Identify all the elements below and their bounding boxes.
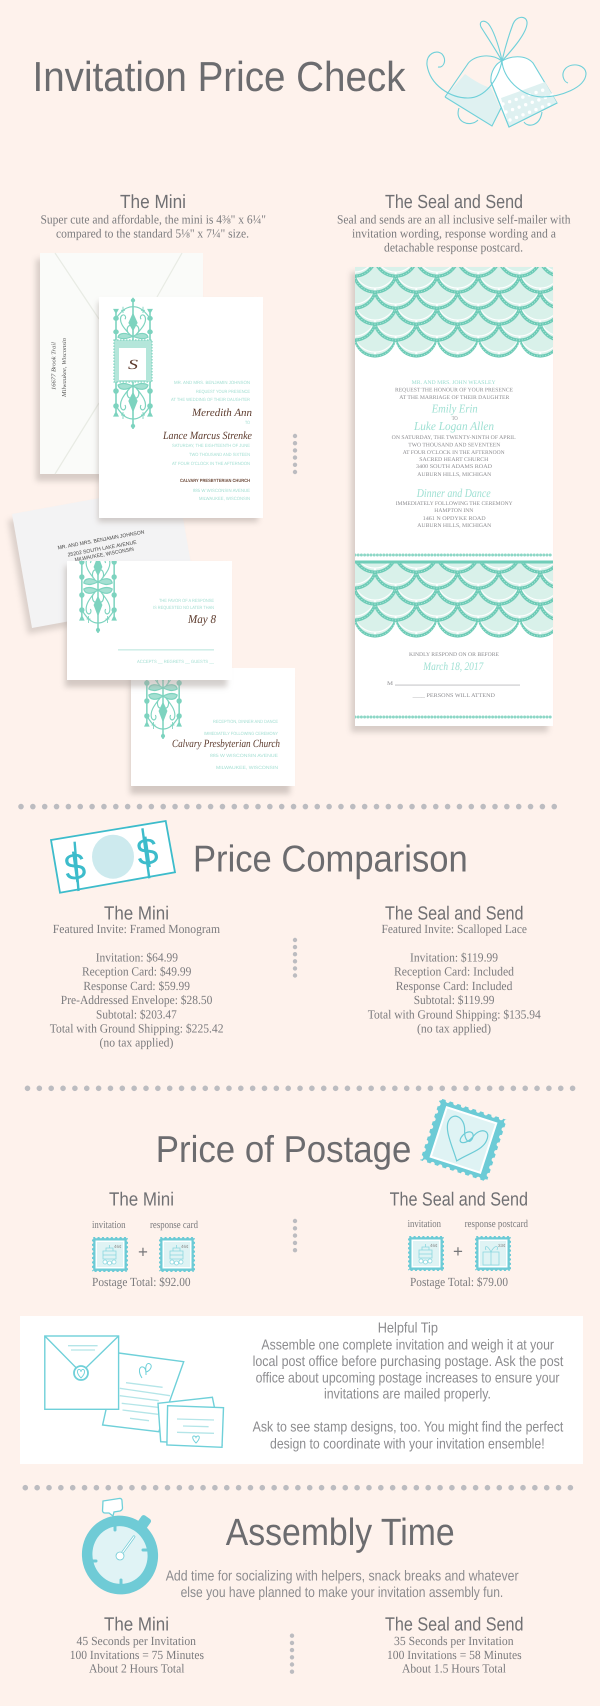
ornament with monogram [114,298,152,429]
tip text: Assemble one complete invitation and weigh it at your [261,1337,554,1353]
photo: reception card [128,668,295,796]
label: invitation: invitation [92,1220,126,1231]
ornament [79,561,117,633]
needle [120,1537,134,1556]
label: response postcard: response postcard [465,1219,529,1230]
icon: dollar bill [51,821,175,893]
vertical dots assembly [290,1636,294,1672]
ornament [144,680,182,739]
recipient address [57,529,145,563]
back reply card [158,1397,222,1445]
price list lines: (no tax applied) [100,1036,173,1050]
price list lines: Subtotal: $119.99 [414,993,494,1007]
price list lines: Featured Invite: Framed Monogram [53,922,220,936]
response wording: May 8 [187,612,216,626]
invitation wording: AT FOUR O'CLOCK IN THE AFTERNOON [172,461,250,466]
invitation wording: AT THE WEDDING OF THEIR DAUGHTER [171,397,251,402]
invitation wording: Dinner and Dance [416,486,491,500]
reception wording: 885 W WISCONSIN AVENUE [210,753,278,758]
return address: 16677 Brook Trail [50,342,58,390]
price list lines: Pre-Addressed Envelope: $28.50 [61,993,212,1007]
invitation wording: MILWAUKEE, WISCONSIN [199,496,250,501]
panel: mini assembly time [70,1615,204,1676]
reception wording: IMMEDIATELY FOLLOWING CEREMONY [204,731,278,736]
dollar sign left bar [75,842,78,891]
heading: The Mini: The Mini [104,1615,169,1636]
dollar sign right bar [142,828,149,878]
reception wording: MILWAUKEE, WISCONSIN [216,765,278,770]
left bell [445,56,502,126]
invitation wording: IMMEDIATELY FOLLOWING THE CEREMONY [396,501,513,507]
invitation wording: AT FOUR O'CLOCK IN THE AFTERNOON [403,450,505,456]
vertical dots between invitation photos [293,436,297,472]
text: seal and send description: Seal and sends are an all inclusive self-mailer with [337,212,571,226]
dotted divider 2 [28,1086,573,1091]
assembly lines: About 1.5 Hours Total [402,1662,506,1676]
recipient address: MR. AND MRS. BENJAMIN JOHNSON [57,529,145,551]
invitation wording: TWO THOUSAND AND SEVENTEEN [408,443,500,449]
price list lines: Reception Card: Included [394,965,515,979]
invitation wording: Luke Logan Allen [413,419,494,433]
tip text [253,1321,563,1452]
tip text: Helpful Tip [378,1321,438,1337]
heading: The Seal and Send: The Seal and Send [390,1189,528,1210]
invitation wording: 1461 N OPDYKE ROAD [423,516,486,522]
plus sign: + [453,1242,463,1261]
text: assembly note: else you have planned to make your invitation assembly fun. [181,1585,503,1601]
heading: The Seal and Send: The Seal and Send [385,903,524,924]
icon: stopwatch [74,1498,166,1603]
stamp: response card: 46¢ [181,1244,189,1249]
assembly lines [387,1634,522,1676]
stamp: invitation: 46¢ [114,1244,122,1249]
photo: mini invitation card [98,297,263,522]
dollar sign right: $ [134,830,161,875]
invitation wording: 3400 SOUTH ADAMS ROAD [416,464,492,470]
invitation wording: MR. AND MRS. BENJAMIN JOHNSON [174,380,250,385]
text: seal and send description: invitation wording, response wording and a [352,226,556,240]
assembly lines: 100 Invitations = 58 Minutes [387,1648,522,1662]
invitation wording: REQUEST THE HONOUR OF YOUR PRESENCE [395,388,514,394]
watch body [74,1507,166,1603]
dotted divider 1 [21,804,566,809]
assembly lines: 100 Invitations = 75 Minutes [70,1648,204,1662]
invitation wording: AUBURN HILLS, MICHIGAN [417,472,491,478]
invitation wording [392,380,516,529]
recipient address: MILWAUKEE, WISCONSIN [74,547,135,563]
vertical dots price comparison [293,940,297,976]
response wording [118,598,216,664]
return address [50,338,68,398]
heading: Assembly Time: Assembly Time [226,1512,455,1554]
invitation wording: ON SATURDAY, THE TWENTY-NINTH OF APRIL [392,435,516,441]
reception wording [172,719,280,770]
scalloped lace band lower [354,560,561,639]
text: mini description [40,212,266,240]
invitation wording: REQUEST YOUR PRESENCE [196,389,250,394]
envelope with seal [45,1336,119,1409]
illustration: invitation suite [45,1336,223,1447]
price list lines: (no tax applied) [417,1021,491,1035]
heading: Price of Postage: Price of Postage [156,1128,411,1170]
text: assembly note: Add time for socializing with helpers, snack breaks and whatever [166,1569,519,1585]
price list lines: Reception Card: $49.99 [82,965,191,979]
invitation wording: MR. AND MRS. JOHN WEASLEY [412,380,496,386]
heading: The Mini: The Mini [109,1189,174,1210]
invitation sheet [103,1353,184,1432]
price list lines: Response Card: Included [396,979,513,993]
postage total: Postage Total: $79.00 [410,1275,508,1289]
response wording: THE FAVOR OF A RESPONSE [159,598,214,603]
price list lines [368,922,541,1035]
photo: back of mini envelope [36,253,203,481]
invitation wording: AUBURN HILLS, MICHIGAN [417,523,491,529]
side knob [135,1514,152,1532]
vertical dots postage [293,1221,297,1258]
price list lines [50,922,223,1050]
plus sign: + [138,1242,148,1262]
response wording: ACCEPTS __ REGRETS __ GUESTS __ [137,659,214,664]
panel: seal and send postage [390,1189,529,1289]
ribbon and bow [427,17,586,98]
dotted lace border [355,554,553,556]
scalloped lace band top [354,267,561,359]
front reply card [167,1406,224,1447]
return address: Milwaukee, Wisconsin [61,338,68,398]
title: Invitation Price Check [32,53,406,100]
price list lines: Invitation: $64.99 [96,951,178,965]
stamp: invitation: 46¢ [430,1243,438,1248]
tick marks [92,1526,147,1584]
price list lines: Featured Invite: Scalloped Lace [382,922,527,936]
text: seal and send description: detachable response postcard. [384,241,523,255]
label: response card: response card [150,1220,199,1231]
assembly lines: About 2 Hours Total [89,1662,185,1676]
tip text: invitations are mailed properly. [324,1387,491,1403]
panel: seal and send assembly time [385,1615,524,1676]
text: seal and send description [337,212,571,255]
price list lines: Total with Ground Shipping: $135.94 [368,1007,541,1021]
price list lines: Subtotal: $203.47 [96,1007,177,1021]
invitation wording: SACRED HEART CHURCH [419,457,488,463]
response wording: ____ PERSONS WILL ATTEND [412,693,495,699]
invitation wording: Lance Marcus Strenke [162,430,252,442]
panel: mini postage [92,1189,199,1289]
price list lines: Total with Ground Shipping: $225.42 [50,1021,223,1035]
invitation wording: TO [245,420,250,425]
panel: seal and send price list [368,903,541,1035]
assembly lines: 35 Seconds per Invitation [394,1634,514,1648]
invitation wording: Emily Erin [431,402,478,416]
invitation wording: Meredith Ann [191,407,252,419]
heading: The Mini: The Mini [104,903,169,924]
invitation wording: TWO THOUSAND AND SIXTEEN [189,452,250,457]
postage total: Postage Total: $92.00 [92,1275,191,1289]
text: mini description: compared to the standard 5⅛" x 7¼" size. [56,226,249,240]
assembly lines [70,1634,204,1676]
heading: The Mini (formats): The Mini [120,192,186,213]
icon: large postage stamp with heart [420,1098,507,1182]
invitation wording [162,380,252,501]
text: mini description: Super cute and affordable, the mini is 4⅜" x 6¼" [40,212,266,226]
price list lines: Invitation: $119.99 [410,951,498,965]
invitation wording: TO [452,416,458,422]
heading: The Seal and Send: The Seal and Send [385,1615,524,1636]
response wording: M [387,681,393,687]
ornament with monogram: S [128,358,138,373]
dollar sign left: $ [62,845,89,890]
heading: Price Comparison: Price Comparison [193,838,468,880]
dotted lace border bottom [355,716,553,718]
photo: seal and send invitation [351,267,561,732]
response wording: KINDLY RESPOND ON OR BEFORE [409,652,500,658]
recipient address: 25202 SOUTH LAKE AVENUE [67,540,138,558]
photo: response card [62,561,232,690]
panel: mini price list [50,903,223,1050]
invitation wording: AT THE MARRIAGE OF THEIR DAUGHTER [399,395,510,401]
bell clappers [458,108,542,125]
right bell [491,57,557,127]
top tag [102,1498,122,1516]
dotted divider 3 [25,1485,571,1490]
tip text: design to coordinate with your invitation ensemble! [270,1436,545,1452]
icon: wedding bells [427,17,586,127]
reception wording: RECEPTION, DINNER AND DANCE [213,719,278,724]
label: invitation: invitation [408,1219,442,1230]
text: assembly note [166,1569,519,1601]
bill centre oval [92,835,134,879]
panel: helpful tip [20,1316,583,1464]
price list lines: Response Card: $59.99 [83,979,190,993]
heading: The Seal and Send (formats): The Seal and Send [385,192,523,213]
response wording [387,652,520,699]
watch face [86,1520,154,1590]
invitation wording: HAMPTON INN [434,508,473,514]
assembly lines: 45 Seconds per Invitation [76,1634,197,1648]
photo: response envelope [8,484,197,634]
invitation wording: SATURDAY, THE EIGHTEENTH OF JUNE [172,443,250,448]
reception wording: Calvary Presbyterian Church [172,738,280,750]
response wording: IS REQUESTED NO LATER THAN [153,605,214,610]
response wording: March 18, 2017 [422,661,484,673]
invitation wording: CALVARY PRESBYTERIAN CHURCH [180,478,251,483]
invitation wording: 885 W WISCONSIN AVENUE [193,488,250,493]
stamp: response postcard: 33¢ [498,1243,506,1248]
